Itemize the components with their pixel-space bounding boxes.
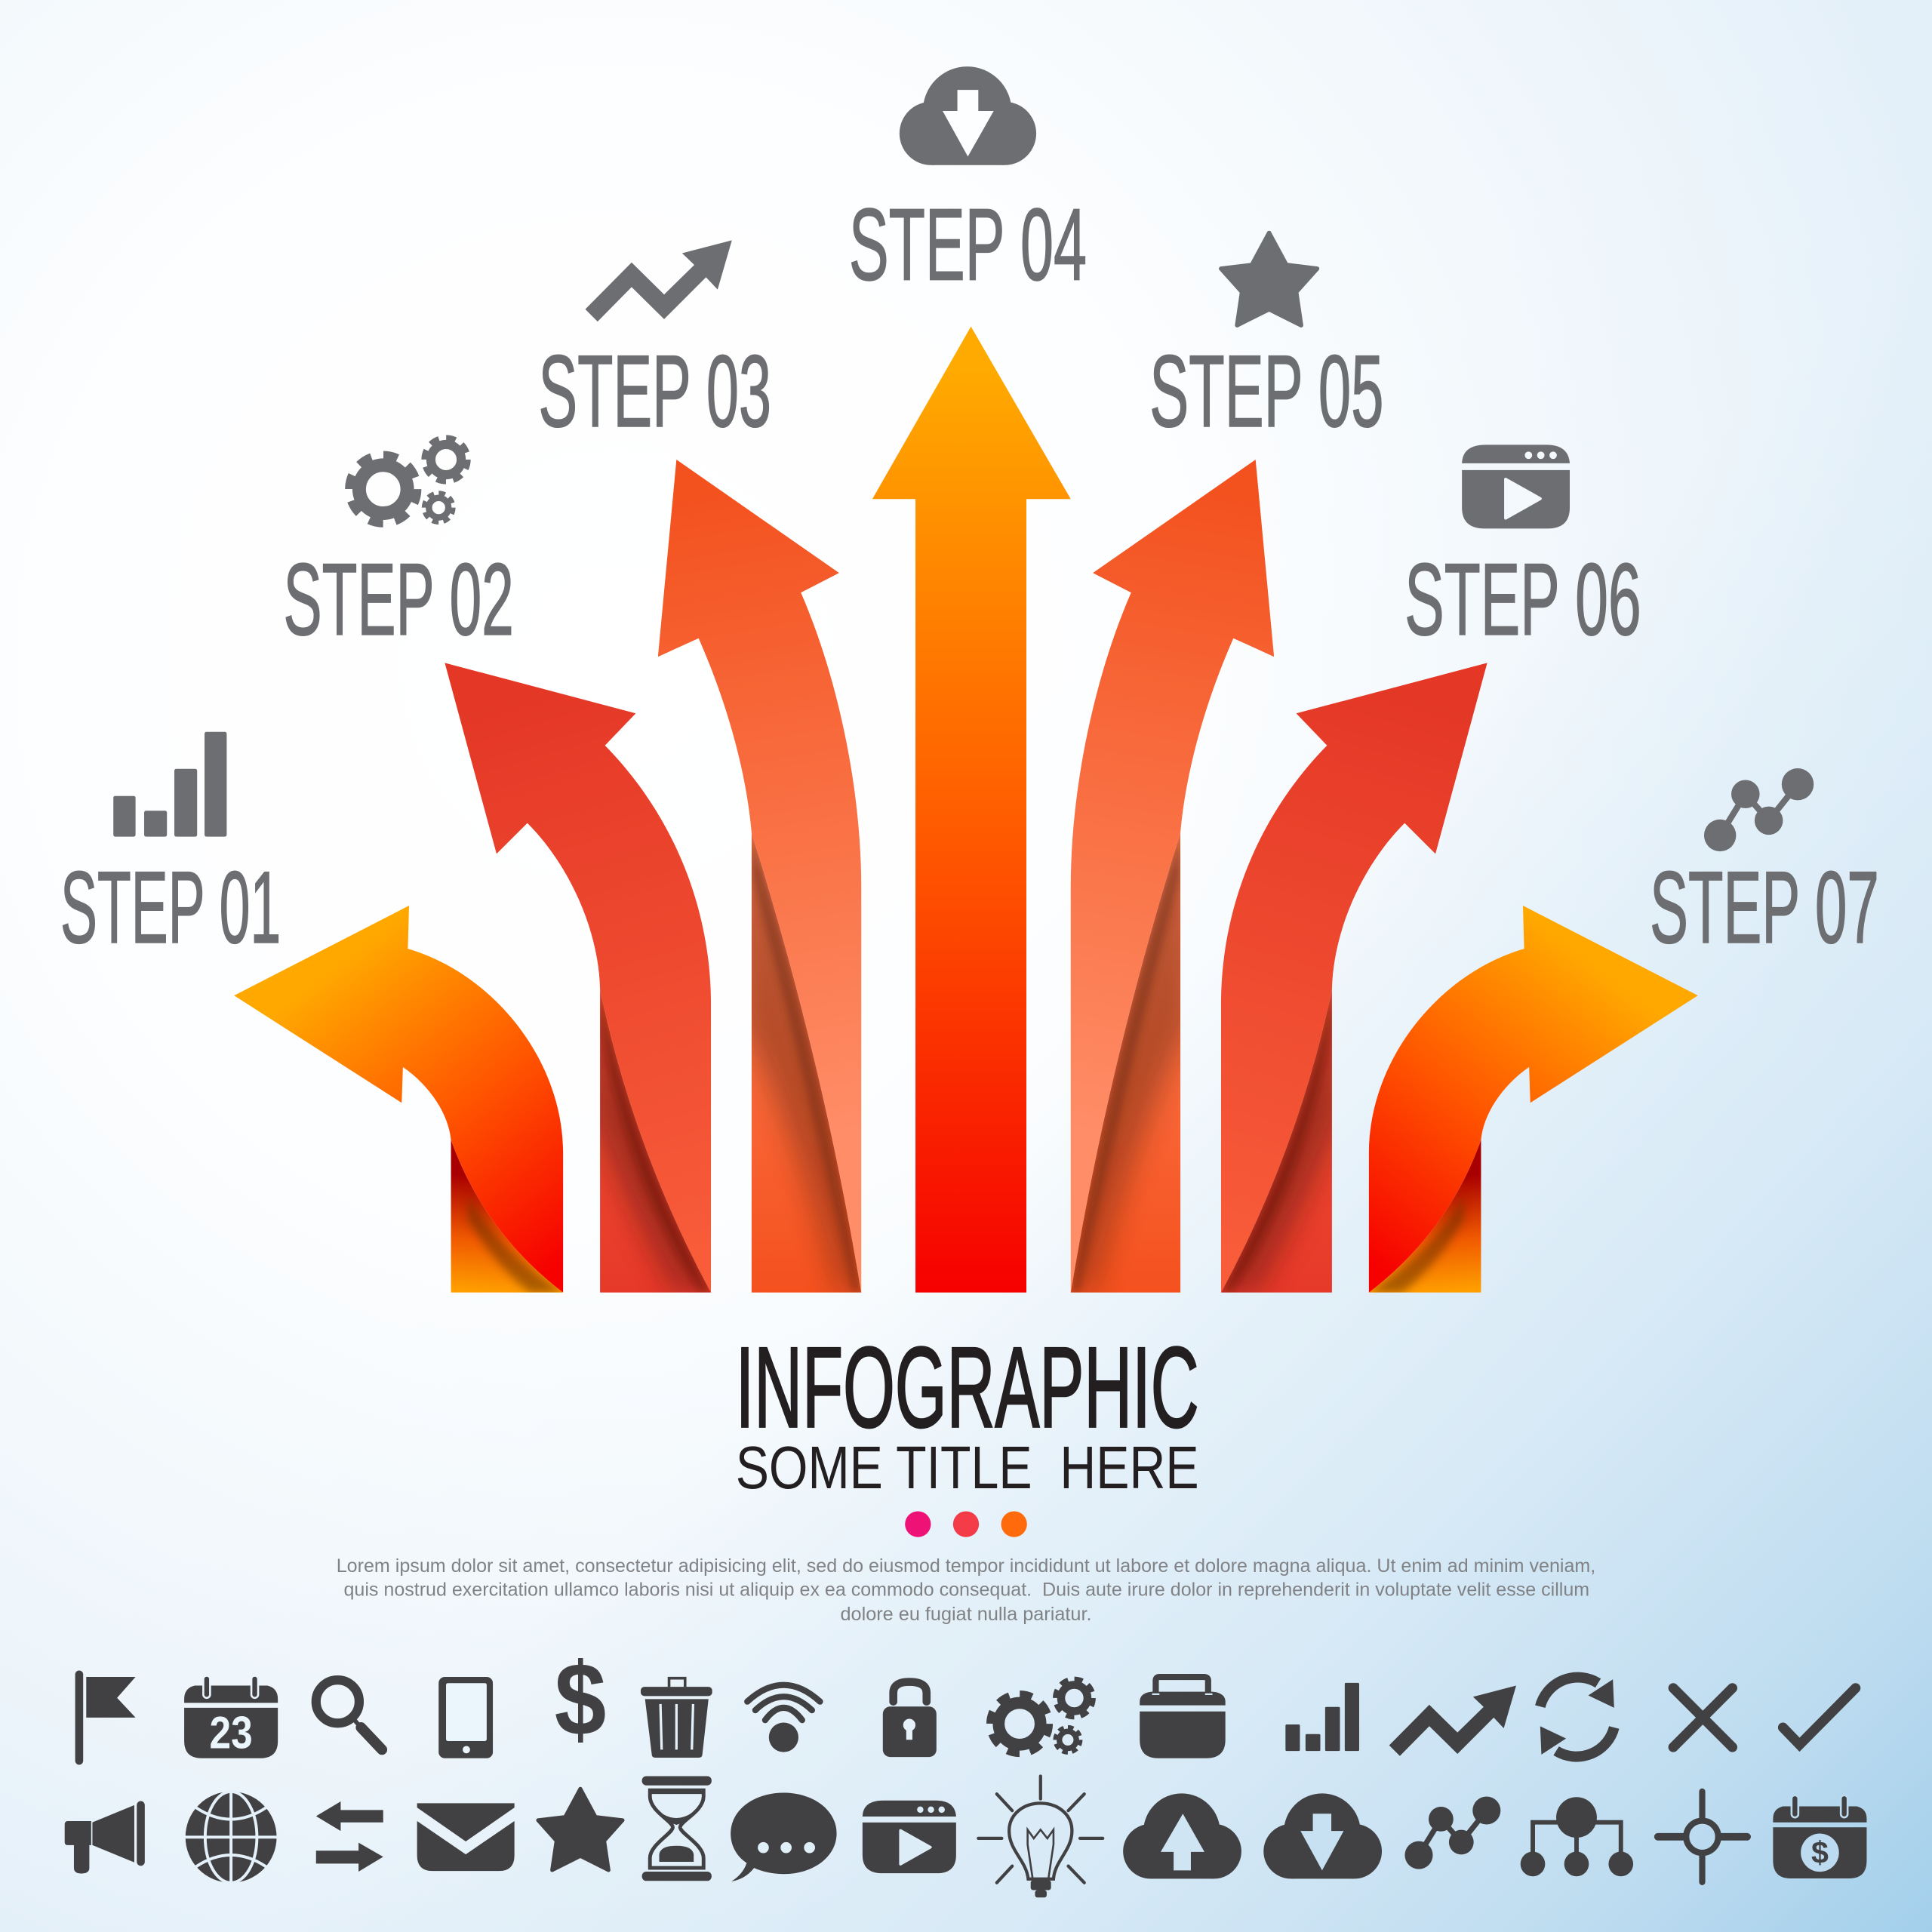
- icon: flag: [75, 1670, 136, 1764]
- arrow: step 02: [445, 663, 711, 1293]
- step 05 label: STEP 05: [1149, 334, 1383, 448]
- icon: wifi: [747, 1685, 820, 1752]
- three dots: [905, 1511, 1027, 1537]
- icon: cloud upload: [1123, 1793, 1241, 1878]
- icon: dollar: $: [555, 1642, 606, 1758]
- subtitle: SOME TITLE HERE: [736, 1434, 1199, 1501]
- icon: step 03 trend arrow: [586, 240, 732, 321]
- icon: swap arrows: [316, 1801, 383, 1872]
- icon: step 07 connected nodes: [1704, 768, 1814, 851]
- icon: step 01 bars: [113, 732, 226, 837]
- icon: check: [1783, 1688, 1856, 1745]
- icon: connected nodes: [1404, 1796, 1500, 1869]
- icon: hourglass: [642, 1776, 712, 1881]
- body text: dolore eu fugiat nulla pariatur.: [840, 1604, 1092, 1625]
- step 02 label: STEP 02: [284, 542, 514, 657]
- icon: video player: [863, 1801, 956, 1873]
- step 04 label: STEP 04: [849, 187, 1087, 302]
- icon: step 06 video player: [1462, 445, 1570, 528]
- icon: hierarchy: [1521, 1797, 1633, 1876]
- title: INFOGRAPHIC: [736, 1324, 1199, 1452]
- icon: briefcase: [1140, 1677, 1226, 1758]
- arrow: step 05: [1071, 460, 1274, 1293]
- icon: megaphone: [65, 1801, 145, 1873]
- step 06 label: STEP 06: [1404, 542, 1641, 657]
- step 03 label: STEP 03: [538, 334, 771, 448]
- icon: lock: [883, 1682, 937, 1757]
- arrow: step 04: [872, 327, 1071, 1293]
- icon: magnifier: [316, 1680, 382, 1749]
- step 01 label: STEP 01: [60, 850, 281, 964]
- body text: [337, 1555, 1595, 1625]
- body text: quis nostrud exercitation ullamco laboris nisi ut aliquip ex ea commodo consequat. Duis aute irure dolor in reprehenderit in voluptate velit esse cillum: [344, 1579, 1589, 1600]
- icon row 1: [75, 1642, 1856, 1764]
- icon: speech bubble: [731, 1793, 837, 1881]
- icon: step 04 cloud download: [900, 66, 1036, 165]
- icon: close: [1673, 1688, 1733, 1747]
- icon: bars: [1285, 1683, 1359, 1751]
- icon row 2: [65, 1776, 1866, 1897]
- icon: calendar dollar: $: [1811, 1835, 1829, 1870]
- icon: star: [538, 1789, 623, 1870]
- icon: calendar 23: [184, 1675, 278, 1758]
- icon: gears: [991, 1679, 1093, 1752]
- arrow: step 01: [234, 906, 563, 1293]
- icon: calendar 23: 23: [210, 1707, 253, 1758]
- icon: light bulb: [978, 1776, 1103, 1897]
- icon: phone: [438, 1677, 493, 1758]
- icon: calendar dollar: [1773, 1795, 1866, 1878]
- icon: crosshair: [1658, 1792, 1747, 1882]
- icon: envelope: [417, 1803, 515, 1871]
- arrow: step 03: [658, 460, 861, 1293]
- icon: cloud download: [1263, 1793, 1382, 1878]
- arrow: step 06: [1221, 663, 1487, 1293]
- arrow: step 07: [1369, 906, 1698, 1293]
- body text: Lorem ipsum dolor sit amet, consectetur adipisicing elit, sed do eiusmod tempor incididunt ut labore et dolore magna aliqua. Ut enim ad minim veniam,: [337, 1555, 1595, 1577]
- icon: step 02 gears: [350, 438, 468, 522]
- icon: trash: [641, 1678, 712, 1758]
- icon: sync: [1540, 1678, 1614, 1757]
- icon: globe: [185, 1792, 277, 1883]
- icon: step 05 star: [1221, 233, 1317, 325]
- icon: trend arrow: [1389, 1685, 1516, 1756]
